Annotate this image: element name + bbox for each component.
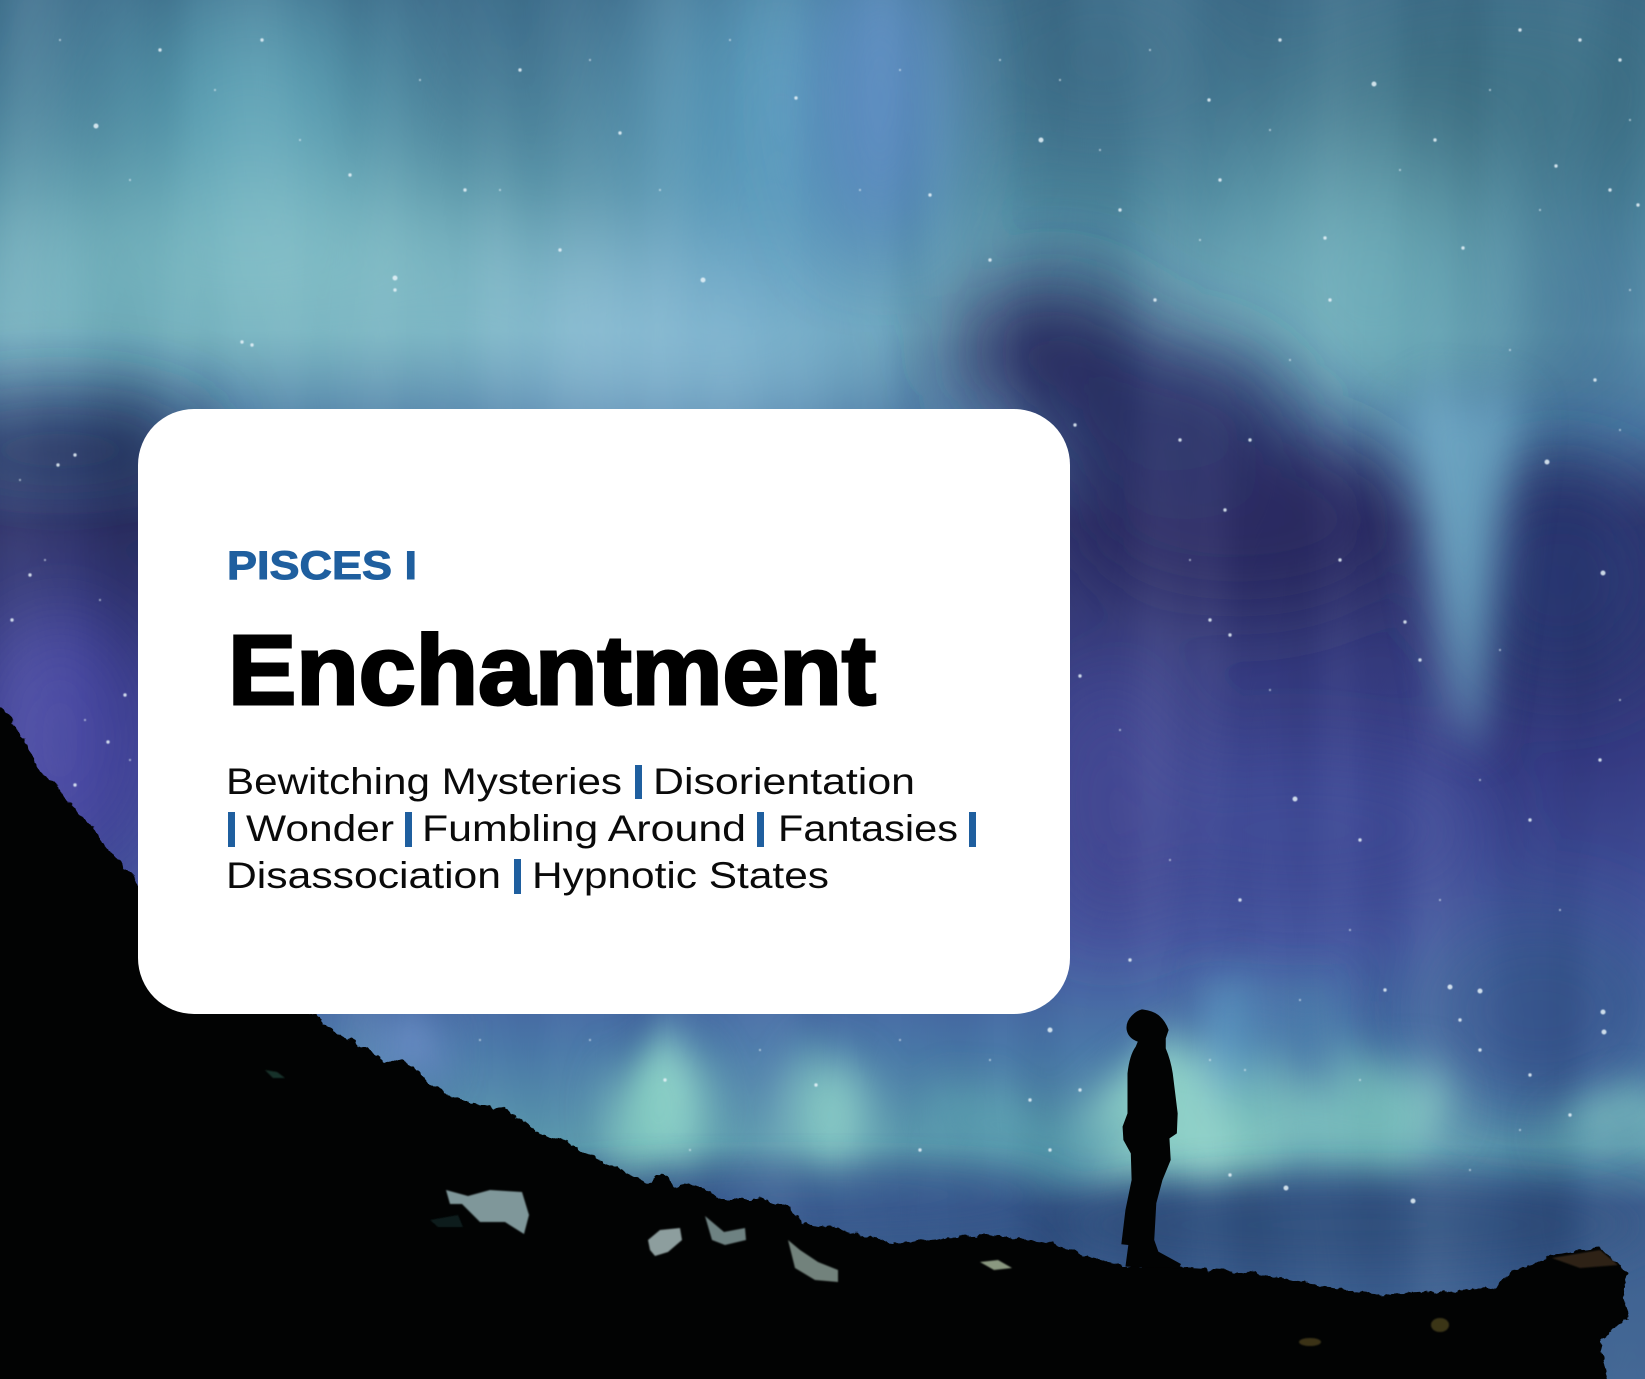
keyword list: Bewitching Mysteries <box>226 761 622 802</box>
keyword list <box>226 761 976 896</box>
keyword list: Disassociation <box>226 855 501 896</box>
icon: person looking up <box>1121 1009 1181 1268</box>
keyword list: Hypnotic States <box>532 855 829 896</box>
keyword list: Wonder <box>246 808 394 849</box>
panel: title card <box>138 409 1070 1014</box>
keyword list: Fantasies <box>778 808 958 849</box>
hillside silhouette <box>0 700 1629 1379</box>
heading: Pisces I: PISCES I <box>227 544 417 588</box>
foreground rocks <box>265 1070 1618 1346</box>
keyword list: Disorientation <box>653 761 915 802</box>
keyword list: Fumbling Around <box>422 808 746 849</box>
title: Enchantment: Enchantment <box>228 615 876 725</box>
